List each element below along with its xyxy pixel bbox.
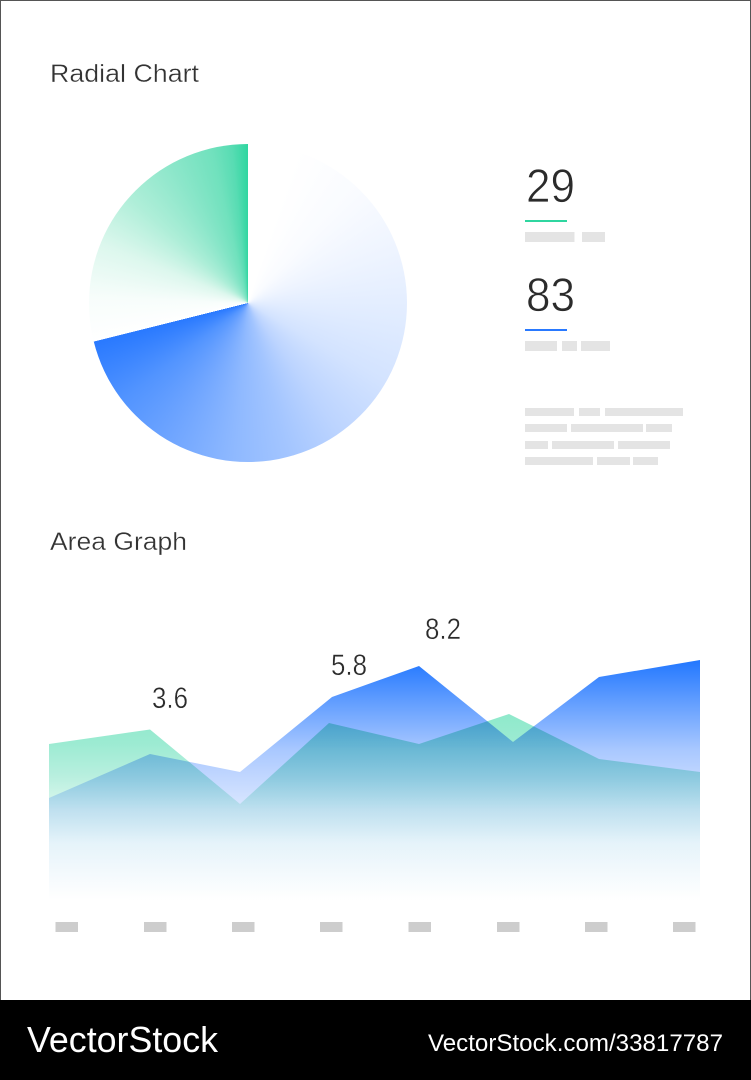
stat: 83: 83	[526, 268, 575, 321]
heading: Area Graph: Area Graph	[50, 528, 187, 556]
stat: 83	[525, 268, 610, 351]
footer logo text: VectorStock	[27, 1019, 219, 1060]
area series: green	[49, 714, 700, 900]
pie chart: radial chart	[89, 144, 407, 462]
footer url text: VectorStock.com/33817787	[428, 1030, 723, 1057]
footer bar	[0, 1000, 751, 1080]
x-axis tick placeholders	[56, 922, 696, 932]
heading: Radial Chart: Radial Chart	[50, 60, 199, 88]
value label: 5.8: 5.8	[331, 649, 367, 682]
area graph	[49, 660, 700, 900]
value label: 3.6: 3.6	[152, 682, 188, 715]
area series: blue	[49, 660, 700, 900]
stat: 29	[525, 159, 605, 242]
value label: 8.2: 8.2	[425, 613, 461, 646]
placeholder text block	[525, 408, 683, 465]
stat: 29: 29	[526, 159, 575, 212]
